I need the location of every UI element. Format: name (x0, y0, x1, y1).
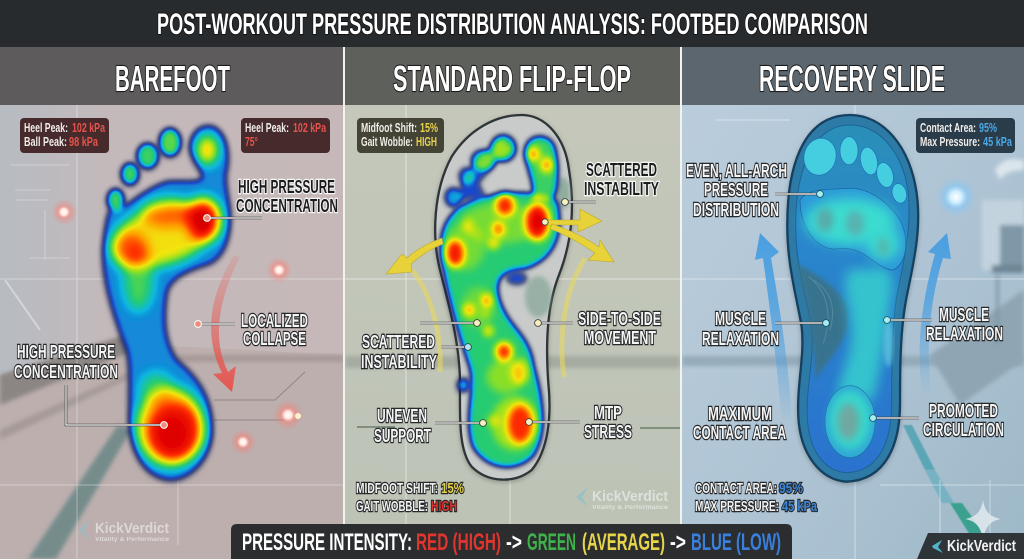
stats: flip-flop: GAIT WOBBLE: (356, 498, 428, 515)
label: maximum contact area: MAXIMUM (708, 404, 772, 424)
callout: side-to-side movement (535, 309, 661, 348)
info box: barefoot left: 98 kPa (69, 135, 99, 149)
header band: recovery slide (682, 47, 1024, 105)
callout: high pressure concentration lower: HIGH PRESSURE (17, 342, 115, 362)
legend: pressure intensity: -> (506, 529, 522, 556)
insole: recovery slide (787, 115, 918, 482)
watermark: flip-flop: Vitality & Performance (592, 505, 669, 511)
callout: uneven support (374, 406, 486, 446)
callout: muscle relaxation right (884, 305, 1003, 344)
icon: sparkle (965, 500, 1001, 540)
callout: side-to-side movement: MOVEMENT (584, 328, 656, 348)
slide background (682, 50, 1024, 559)
callout: scattered instability upper: SCATTERED (586, 160, 657, 180)
callout: even all-arch pressure distribution: DISTRIBUTION (693, 200, 779, 220)
arrow: upward left (755, 233, 792, 427)
info box: recovery slide: Contact Area: (920, 121, 976, 135)
callout: promoted circulation (870, 401, 1004, 440)
watermark: barefoot: KickVerdict (95, 520, 169, 537)
info box: barefoot right: 102 kPa (293, 121, 327, 135)
info box: barefoot left: 102 kPa (72, 121, 106, 135)
legend: pressure intensity: RED (HIGH) (416, 529, 501, 556)
info box: barefoot left: Ball Peak: (24, 135, 67, 149)
stats: recovery slide: MAX PRESSURE: (695, 498, 779, 515)
callout: scattered instability lower: SCATTERED (362, 332, 435, 352)
callout: even all-arch pressure distribution: PRESSURE (704, 180, 768, 200)
legend: pressure intensity: BLUE (LOW) (691, 529, 781, 556)
heading: flip-flop: STANDARD FLIP-FLOP (393, 58, 631, 99)
info box: flip-flop: HIGH (416, 135, 437, 149)
info box: recovery slide (916, 118, 1015, 153)
watermark: flip-flop: KickVerdict (592, 488, 668, 505)
arc: right side movement (562, 258, 585, 377)
callout: even all-arch pressure distribution (686, 161, 823, 220)
callout: mtp stress: MTP (594, 403, 622, 423)
header band: flip-flop (345, 47, 680, 105)
title bar (0, 0, 1024, 47)
glow markers (51, 199, 303, 455)
badge: kickverdict (917, 533, 1024, 559)
label: maximum contact area (693, 404, 786, 443)
stats: recovery slide: 45 kPa (782, 498, 817, 515)
callout: uneven support: UNEVEN (377, 406, 427, 426)
callout: high pressure concentration upper: CONCENTRATION (236, 196, 338, 216)
legend: pressure intensity (231, 524, 792, 559)
callout: scattered instability upper: INSTABILITY (584, 179, 659, 199)
callout: muscle relaxation left: RELAXATION (702, 329, 779, 349)
stats: flip-flop: MIDFOOT SHIFT: (356, 480, 438, 497)
footprint heatmap: barefoot (103, 126, 230, 480)
callout: even all-arch pressure distribution: EVEN, ALL-ARCH (686, 161, 787, 181)
callout: muscle relaxation right: MUSCLE (939, 305, 989, 325)
watermark: flip-flop (576, 487, 669, 511)
info box: barefoot left (20, 118, 109, 153)
callout: mtp stress: STRESS (584, 422, 632, 442)
panel: recovery slide (682, 47, 1024, 559)
info box: flip-flop: Gait Wobble: (361, 135, 413, 149)
info box: recovery slide: 45 kPa (983, 135, 1013, 149)
watermark: barefoot (78, 520, 170, 543)
stats: flip-flop (356, 480, 464, 515)
callout: high pressure concentration lower (14, 342, 167, 428)
arrow: upward right (920, 233, 951, 395)
callout: high pressure concentration upper: HIGH PRESSURE (238, 177, 335, 197)
stats: flip-flop: HIGH (431, 498, 457, 515)
sole heatmap: flip-flop (435, 115, 572, 480)
flip-flop background (345, 50, 680, 559)
barefoot background (0, 50, 345, 559)
info box: flip-flop: 15% (420, 121, 438, 135)
stats: recovery slide: CONTACT AREA: (695, 480, 777, 497)
info box: recovery slide: Max Pressure: (920, 135, 980, 149)
stats: flip-flop: 15% (441, 480, 464, 497)
callout: scattered instability lower: INSTABILITY (361, 352, 437, 372)
callout: uneven support: SUPPORT (374, 426, 431, 446)
info box: flip-flop: Midfoot Shift: (361, 121, 417, 135)
label: maximum contact area: CONTACT AREA (693, 423, 786, 443)
callout: side-to-side movement: SIDE-TO-SIDE (578, 309, 661, 329)
callout: muscle relaxation left (702, 309, 829, 349)
stats: recovery slide: 95% (779, 480, 803, 497)
legend: pressure intensity: PRESSURE INTENSITY: (242, 529, 412, 556)
callout: localized collapse (195, 311, 308, 349)
legend: pressure intensity: -> (670, 529, 686, 556)
legend: pressure intensity: GREEN (527, 529, 576, 556)
info box: barefoot left: Heel Peak: (24, 121, 68, 135)
watermark: barefoot: Vitality & Performance (95, 537, 170, 543)
callout: localized collapse: COLLAPSE (243, 329, 306, 349)
info box: recovery slide: 95% (979, 121, 997, 135)
header band: barefoot (0, 47, 343, 105)
callout: localized collapse: LOCALIZED (241, 311, 308, 331)
yellow arrows: instability (386, 209, 614, 274)
callout: scattered instability upper (562, 160, 659, 205)
info box: barefoot right: 75° (245, 135, 258, 149)
panel dividers (343, 47, 682, 559)
callout marker: metatarsal (542, 219, 548, 225)
callout: high pressure concentration upper (204, 177, 338, 221)
panel: barefoot (0, 47, 345, 559)
info box: flip-flop (357, 118, 444, 153)
legend: pressure intensity: (AVERAGE) (582, 529, 665, 556)
panel: standard flip-flop (345, 47, 680, 559)
info box: barefoot right (241, 118, 330, 153)
callout: high pressure concentration lower: CONCENTRATION (14, 362, 118, 382)
heading: barefoot: BAREFOOT (115, 58, 230, 99)
info box: barefoot right: Heel Peak: (245, 121, 289, 135)
callout: muscle relaxation left: MUSCLE (715, 309, 766, 329)
glow marker (936, 177, 976, 217)
stats: recovery slide (695, 480, 817, 515)
callout: mtp stress (526, 403, 632, 442)
arc: left side movement (412, 270, 440, 372)
callout: scattered instability lower (361, 320, 480, 372)
arrow: localized collapse (211, 255, 240, 392)
